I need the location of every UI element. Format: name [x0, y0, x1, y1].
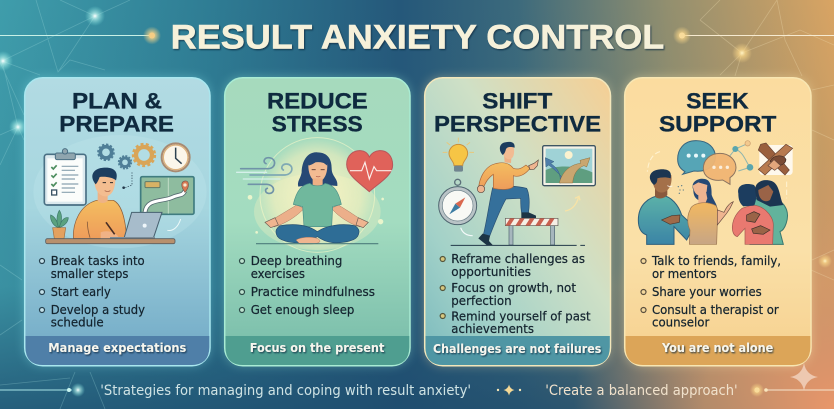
panel: reduce stress: [224, 77, 410, 366]
bullet list: plan: schedule: [51, 316, 104, 330]
panel: plan and prepare: [24, 77, 210, 366]
figure: two women embracing: [732, 180, 787, 244]
bullet list: shift: Reframe challenges as: [451, 252, 585, 266]
heading: shift perspective: [434, 88, 601, 136]
icon: light bulb: [443, 138, 474, 172]
bullet list: plan: Break tasks into: [51, 254, 145, 268]
figure: woman talking: [688, 179, 733, 244]
panel: shift perspective: [424, 77, 611, 366]
footer band: challenges are not failures: [426, 336, 610, 365]
bullet list: seek: Consult a therapist or: [652, 303, 780, 317]
icon: gears: [98, 144, 155, 169]
heading: reduce stress: STRESS: [272, 111, 363, 136]
footer band: you are not alone: [626, 336, 810, 365]
bullet list: reduce: Deep breathing: [251, 254, 342, 268]
bullet list: seek: [641, 254, 781, 330]
heading: seek support: [659, 88, 777, 136]
ground line: [256, 242, 378, 245]
illustration: person planning at a laptop: [33, 135, 207, 248]
heading: seek support: SUPPORT: [659, 111, 777, 136]
bullet list: shift: Remind yourself of past: [451, 310, 591, 324]
bullet list: shift: opportunities: [451, 265, 531, 279]
figure: student: [73, 168, 127, 239]
bullet list: shift: perfection: [451, 294, 512, 308]
title connector left: [0, 26, 161, 44]
icon: heart with pulse: [347, 151, 393, 192]
heading: shift perspective: SHIFT: [482, 88, 553, 113]
illustration: person stepping over a hurdle: [439, 138, 595, 246]
icon: network nodes: [730, 141, 753, 171]
footer band: challenges are not failures: Challenges are not failures: [433, 341, 601, 356]
title: RESULT ANXIETY CONTROL: [171, 19, 664, 57]
bullet list: shift: [440, 252, 591, 336]
tagline left: 'Strategies for managing and coping with result anxiety': [100, 383, 471, 399]
footer band: you are not alone: You are not alone: [661, 340, 773, 355]
icon: forked road picture: [543, 146, 595, 186]
figure: man: [638, 169, 694, 244]
bullet list: plan: smaller steps: [51, 267, 128, 281]
icon: potted plant: [51, 210, 68, 239]
bullet list: seek: Talk to friends, family,: [651, 254, 781, 268]
figure: woman in lotus pose: [265, 152, 368, 244]
bullet list: shift: Focus on growth, not: [451, 281, 576, 295]
footer band: focus on the present: Focus on the present: [250, 340, 384, 355]
bullet list: shift: achievements: [451, 322, 534, 336]
hurdle: [505, 218, 558, 245]
figure: man stepping forward: [477, 142, 538, 246]
heading: reduce stress: REDUCE: [267, 88, 368, 113]
tagline right: 'Create a balanced approach': [545, 383, 738, 399]
icon: breath wind: [237, 158, 292, 193]
icon: corner sparkle: [790, 363, 818, 391]
icon: checklist clipboard: [44, 149, 86, 205]
illustration: meditating woman: [237, 138, 393, 252]
footer band: focus on the present: [226, 336, 409, 365]
bullet list: plan: Start early: [51, 285, 111, 299]
icon: center sparkle: [497, 384, 521, 396]
footer connector left: [0, 383, 85, 397]
panel: seek support: [624, 77, 812, 366]
bullet list: plan: [40, 254, 145, 330]
bullet list: reduce: Get enough sleep: [251, 303, 355, 317]
ground line: [451, 244, 585, 247]
footer connector right: [750, 383, 834, 397]
desk: [46, 239, 175, 244]
bullet list: seek: counselor: [652, 316, 710, 330]
icon: compass: [439, 179, 477, 225]
bullet list: reduce: exercises: [251, 267, 305, 281]
heading: plan and prepare: PLAN &: [72, 88, 162, 113]
title connector right: [673, 26, 834, 44]
bullet list: reduce: [240, 254, 375, 317]
bullet list: reduce: Practice mindfulness: [251, 285, 375, 299]
icon: roadmap: [141, 177, 194, 214]
heading: plan and prepare: PREPARE: [59, 111, 174, 136]
heading: plan and prepare: [59, 88, 174, 136]
bullet list: seek: Share your worries: [652, 285, 762, 299]
footer band: manage expectations: Manage expectations: [48, 340, 186, 355]
heading: seek support: SEEK: [686, 88, 749, 113]
icon: clock: [162, 143, 190, 171]
bullet list: plan: Develop a study: [51, 303, 145, 317]
illustration: people supporting each other: [638, 141, 793, 244]
icon: laptop: [110, 212, 162, 239]
heading: shift perspective: PERSPECTIVE: [434, 111, 601, 136]
bullet list: seek: or mentors: [652, 267, 717, 281]
icon: speech bubbles: [678, 141, 736, 184]
icon: joined hands: [758, 143, 793, 175]
footer band: manage expectations: [26, 336, 209, 365]
heading: reduce stress: [267, 88, 368, 136]
